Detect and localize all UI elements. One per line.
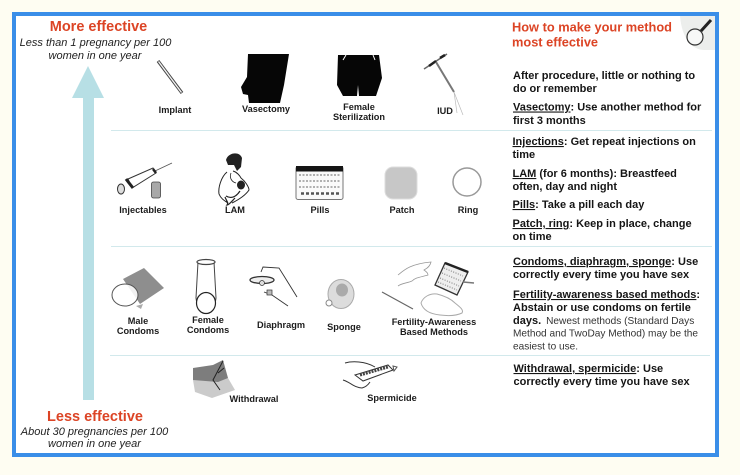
icon: fertility awareness tools: Fertility-Awareness [392, 317, 476, 327]
heading: less effective: About 30 pregnancies per 100 [20, 426, 169, 438]
icon: patch: Patch [389, 205, 415, 215]
icon: female sterilization [333, 55, 385, 122]
icon: fertility awareness tools: Based Methods [400, 327, 468, 337]
text block: hormonal methods advice: LAM (for 6 months): Breastfeed [512, 168, 677, 180]
text block: withdrawal and spermicide advice [514, 363, 690, 388]
icon: ring: Ring [458, 205, 478, 215]
heading: more effective: women in one year [49, 50, 143, 62]
text block: barrier and fertility methods advice: easiest to use. [513, 342, 578, 352]
text block: hormonal methods advice [512, 136, 696, 243]
text block: barrier and fertility methods advice: correctly every time you have sex [513, 269, 690, 281]
icon: magnifying glass [680, 16, 715, 50]
icon: hand with diaphragm: Diaphragm [257, 320, 305, 330]
text block: barrier and fertility methods advice: Abstain or use condoms on fertile [513, 302, 691, 314]
heading: more effective [20, 19, 172, 62]
text block: hormonal methods advice: on time [512, 231, 552, 243]
text block: barrier and fertility methods advice [513, 256, 700, 352]
text block: withdrawal and spermicide advice: Withdrawal, spermicide: Use [514, 363, 663, 375]
icon: male condom: Condoms [117, 326, 159, 336]
icon: breastfeeding mother: LAM [225, 205, 245, 215]
icon: patch [385, 167, 417, 215]
text block: hormonal methods advice: time [512, 149, 535, 161]
icon: spermicide tube [343, 362, 417, 403]
icon: male condom: Male [128, 316, 148, 326]
arrow: effectiveness scale [72, 66, 104, 400]
text block: hormonal methods advice: often, day and night [512, 181, 617, 193]
text block: long-acting methods advice: After procedure, little or nothing to [513, 70, 695, 82]
icon: vasectomy: Vasectomy [242, 104, 291, 114]
icon: syringe and vial [118, 163, 172, 215]
text block: hormonal methods advice: Patch, ring: Keep in place, change [512, 218, 692, 230]
icon: female condom: Female [192, 315, 224, 325]
text block: barrier and fertility methods advice: days. Newest methods (Standard Days [513, 315, 694, 327]
icon: ring [453, 168, 481, 215]
icon: vasectomy [241, 54, 291, 114]
heading: more effective: Less than 1 pregnancy per 100 [20, 37, 172, 49]
text block: hormonal methods advice: Pills: Take a pill each day [512, 199, 645, 211]
text block: hormonal methods advice: Injections: Get repeat injections on [512, 136, 696, 148]
icon: female condom: Condoms [187, 325, 229, 335]
text block: barrier and fertility methods advice: Method and TwoDay Method) may be the [513, 328, 698, 340]
text block: long-acting methods advice [513, 70, 702, 127]
text block: long-acting methods advice: first 3 months [513, 115, 586, 127]
icon: male condom [112, 268, 164, 336]
text block: barrier and fertility methods advice: Condoms, diaphragm, sponge: Use [513, 256, 698, 268]
icon: hand with diaphragm [250, 267, 305, 330]
icon: spermicide tube: Spermicide [367, 393, 417, 403]
icon: female condom [187, 260, 229, 335]
heading: less effective [20, 409, 169, 450]
icon: implant: Implant [159, 105, 191, 115]
text block: long-acting methods advice: Vasectomy: Use another method for [513, 102, 702, 114]
icon: sponge [326, 280, 361, 332]
heading: more effective: More effective [50, 19, 147, 35]
icon: withdrawal: Withdrawal [230, 394, 278, 404]
heading: how to make your method most effective: How to make your method [512, 20, 672, 34]
icon: withdrawal [193, 360, 278, 404]
heading: how to make your method most effective: most effective [512, 34, 598, 50]
icon: female sterilization: Sterilization [333, 112, 385, 122]
text block: long-acting methods advice: do or remember [513, 83, 597, 95]
icon: pill pack: Pills [311, 205, 329, 215]
icon: female sterilization: Female [343, 102, 375, 112]
icon: implant [158, 61, 191, 115]
icon: sponge: Sponge [327, 322, 361, 332]
text block: withdrawal and spermicide advice: correctly every time you have sex [514, 376, 690, 388]
icon: syringe and vial: Injectables [119, 205, 167, 215]
text block: barrier and fertility methods advice: Fertility-awareness based methods: [513, 289, 700, 301]
icon: IUD [424, 54, 463, 116]
icon: fertility awareness tools [382, 262, 476, 337]
icon: breastfeeding mother [219, 153, 249, 215]
icon: IUD: IUD [437, 106, 453, 116]
heading: how to make your method most effective [512, 20, 672, 50]
heading: less effective: women in one year [48, 438, 142, 450]
heading: less effective: Less effective [47, 409, 143, 425]
icon: pill pack [296, 166, 343, 215]
